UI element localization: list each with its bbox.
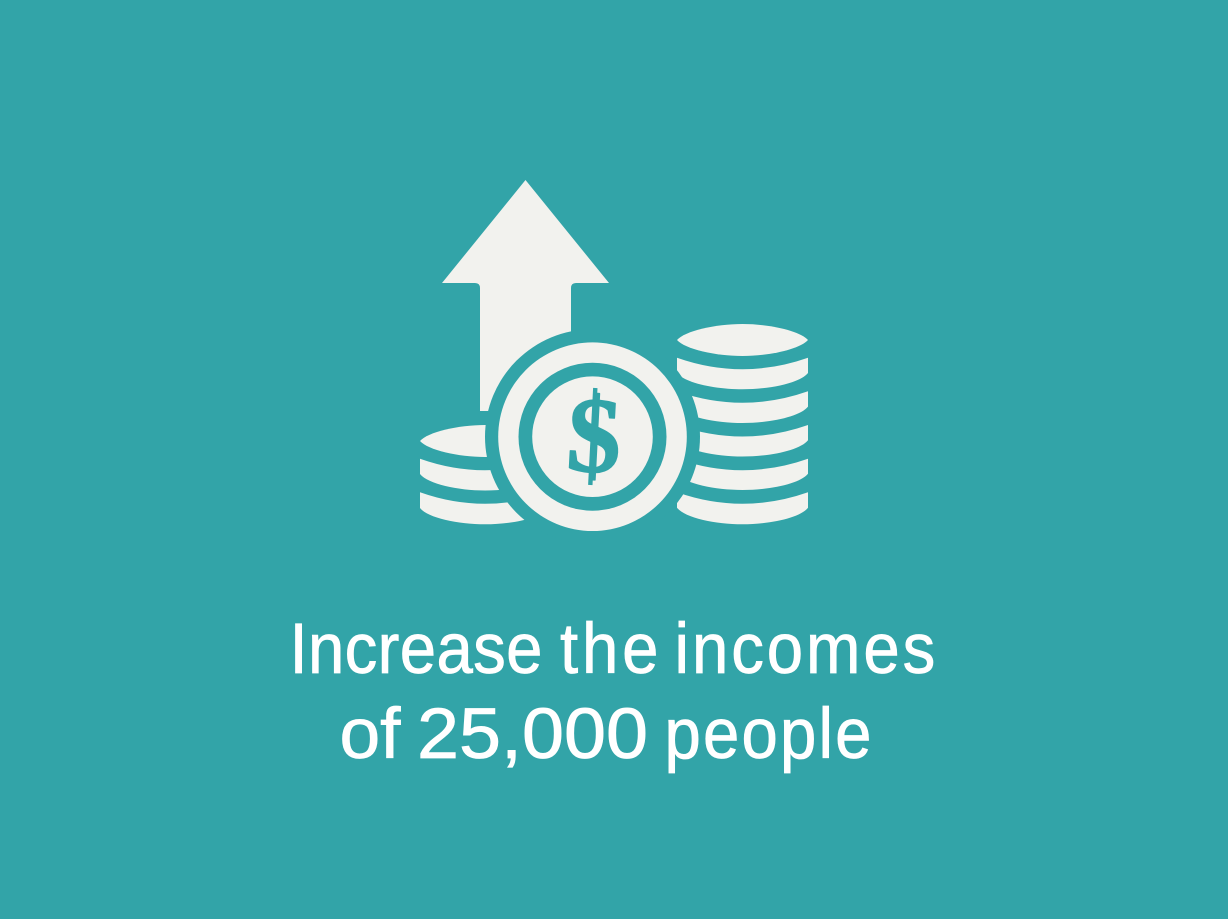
headline [290,610,935,774]
icon: left coin stack [420,425,550,524]
headline line 2: of [340,695,401,774]
icon: money growth [420,180,808,544]
dollar sign: $ [564,375,624,497]
headline line 2: people [664,695,872,774]
headline line 1: Increase [290,610,543,689]
icon: up arrow [442,180,609,411]
headline line 1: the [560,610,658,689]
headline line 2: 25,000 [417,695,648,774]
icon: large dollar coin [498,342,687,531]
headline line 1: incomes [674,610,935,689]
icon: right coin stack [677,324,808,524]
headline line 2 [340,695,872,774]
headline line 1 [290,610,935,689]
